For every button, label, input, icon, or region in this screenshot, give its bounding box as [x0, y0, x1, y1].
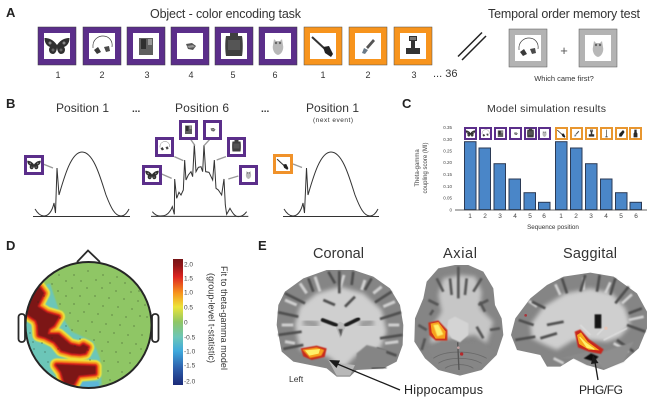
sequence numbers: 1 [55, 70, 61, 80]
frame 1 butterfly [38, 27, 76, 65]
double slash break [458, 32, 486, 60]
thumbnail: butterfly [144, 166, 160, 184]
y axis ticks: 0.35 [443, 125, 452, 130]
position headings: (next event) [313, 117, 353, 124]
frame 3 cabinet [127, 27, 165, 65]
view headings: Saggital [563, 246, 617, 262]
sequence numbers: 1 [320, 70, 326, 80]
y axis ticks: 0 [449, 208, 452, 212]
view headings [313, 246, 617, 262]
left ear [18, 314, 25, 342]
sequence numbers: 3 [411, 70, 417, 80]
connectors [162, 138, 238, 179]
position headings [56, 101, 359, 124]
thumbnail: small object [204, 122, 220, 138]
sagittal activation [575, 329, 604, 354]
nose [77, 250, 100, 262]
sequence numbers [55, 70, 417, 80]
frame 9 stamp [394, 27, 432, 65]
memory test frame: owl [579, 29, 617, 67]
label: Left: Left [289, 374, 304, 384]
encoding sequence frames [38, 27, 432, 65]
plus sign: + [560, 43, 568, 58]
x axis [455, 209, 647, 211]
y axis ticks: 0.05 [443, 196, 452, 200]
chart title: Model simulation results [487, 103, 606, 115]
sequence numbers: 2 [99, 70, 105, 80]
bars [464, 142, 642, 210]
y axis ticks: 0.15 [443, 172, 452, 177]
frame 7 shovel [304, 27, 342, 65]
position headings: Position 1 [306, 101, 359, 115]
position headings: ... [261, 104, 270, 115]
topographic head map [18, 250, 158, 389]
label: Hippocampus: Hippocampus [404, 383, 483, 397]
thumbnail: cabinet [180, 122, 196, 138]
y axis ticks: 0.25 [443, 148, 452, 154]
y axis ticks: 0.20 [443, 160, 452, 165]
x ticks: 2 [574, 213, 578, 220]
x ticks: 3 [498, 213, 502, 220]
y axis ticks [443, 125, 452, 212]
scalp field [26, 262, 152, 388]
colorbar ticks [184, 262, 196, 386]
electrodes [30, 271, 147, 380]
panel label C: C [402, 96, 412, 111]
bar chart [415, 125, 647, 231]
x ticks [468, 213, 638, 220]
colorbar ticks: 0 [184, 320, 188, 326]
label: PHG/FG: PHG/FG [579, 383, 623, 397]
y axis ticks: 0.30 [443, 137, 452, 142]
x ticks: 1 [468, 213, 472, 220]
frame 2 headphones [83, 27, 121, 65]
x ticks: 3 [589, 213, 593, 220]
memory test frame: headphones [509, 29, 547, 67]
x ticks: 2 [483, 213, 487, 220]
axial activation [428, 320, 447, 341]
frame 4 small object [171, 27, 209, 65]
right ear [152, 314, 158, 342]
position headings: Position 6 [175, 101, 229, 115]
sequence numbers: 4 [188, 70, 194, 80]
oscillation 6 [151, 144, 248, 217]
thumbnail: owl [240, 166, 256, 184]
x ticks: 4 [604, 213, 608, 220]
y axis title [415, 142, 429, 194]
colorbar ticks: -1.0 [184, 348, 196, 356]
x ticks: 5 [619, 213, 623, 220]
activation clusters [22, 283, 102, 389]
x ticks: 4 [513, 213, 517, 220]
stimulus strip [465, 128, 641, 139]
sequence numbers: 6 [272, 70, 278, 80]
head outline [26, 262, 152, 388]
colorbar title: Fit to theta-gamma model [219, 266, 229, 370]
brain: axial [414, 265, 503, 376]
connector and thumbnail: shovel [274, 156, 302, 172]
y axis ticks: 0.10 [443, 184, 452, 189]
arrow to PHG/FG [591, 355, 598, 380]
brain: sagittal [511, 273, 647, 370]
x ticks: 6 [634, 213, 638, 220]
x ticks: 1 [559, 213, 563, 220]
arrow to hippocampus [329, 360, 400, 390]
colorbar ticks: -0.5 [184, 334, 196, 342]
question: Which came first? [534, 74, 594, 83]
x ticks: 6 [542, 213, 546, 220]
x axis title: Sequence position [527, 224, 579, 231]
ellipsis to 36: ... 36 [433, 68, 457, 80]
frame 6 owl [259, 27, 297, 65]
connector and thumbnail: butterfly [26, 156, 53, 174]
position headings: ... [132, 104, 141, 115]
colorbar ticks: 1.0 [184, 290, 193, 296]
colorbar title: (group-level t-statistic) [206, 273, 216, 363]
colorbar ticks: 0.5 [184, 304, 193, 312]
y axis title: coupling score (MI) [423, 142, 429, 194]
oscillation 1 [33, 152, 130, 216]
view headings: Axial [443, 246, 477, 262]
sequence numbers: 3 [144, 70, 150, 80]
panel label B: B [6, 96, 15, 111]
thumbnail: headphones [156, 138, 172, 156]
panel label A: A [6, 5, 16, 20]
frame 5 backpack [215, 27, 253, 65]
colorbar ticks: -2.0 [184, 378, 196, 386]
x ticks: 5 [528, 213, 532, 220]
position headings: Position 1 [56, 101, 109, 115]
colorbar [173, 259, 196, 386]
sequence numbers: 5 [230, 70, 236, 80]
view headings: Coronal [313, 246, 364, 262]
oscillation next event [283, 152, 379, 216]
colorbar ticks: 2.0 [184, 262, 193, 268]
coronal activation [301, 346, 327, 360]
sequence numbers: 2 [365, 70, 371, 80]
thumbnail: backpack [228, 138, 244, 156]
panel label E: E [258, 238, 267, 253]
colorbar title [206, 266, 229, 370]
brain: coronal [277, 270, 403, 377]
panel label D: D [6, 238, 15, 253]
heading: encoding task: Object - color encoding task [150, 7, 302, 21]
heading: memory test: Temporal order memory test [488, 7, 641, 21]
frame 8 brush [349, 27, 387, 65]
colorbar ticks: -1.5 [184, 362, 196, 370]
y axis title: Theta-gamma [415, 149, 421, 187]
colorbar ticks: 1.5 [184, 276, 193, 282]
